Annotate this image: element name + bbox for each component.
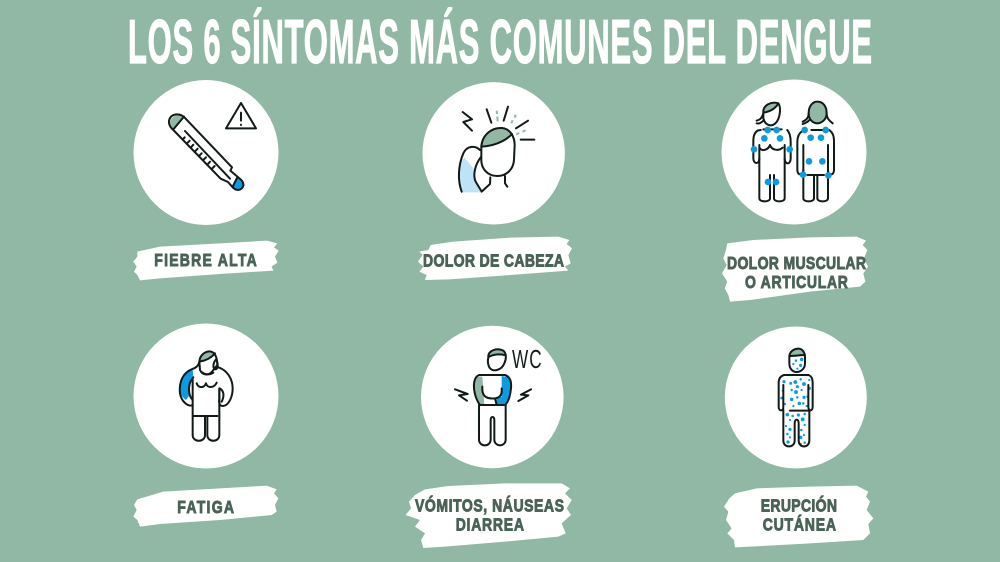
panel: dolor muscular o articular <box>722 80 868 302</box>
icon circle: erupción <box>725 326 867 468</box>
icon circle: vómitos <box>421 326 564 468</box>
icon: thermometer and warning sign <box>169 103 256 190</box>
title: LOS 6 SÍNTOMAS MÁS COMUNES DEL DENGUE <box>128 9 872 77</box>
label brush: dolor de cabeza <box>418 237 572 280</box>
label: fiebre alta: FIEBRE ALTA <box>154 250 257 270</box>
label: vómitos, náuseas, diarrea <box>415 495 564 535</box>
icon circle: dolor muscular <box>722 80 866 224</box>
label: WC sign: WC <box>512 344 542 374</box>
icon: head with pain rays <box>459 107 534 192</box>
label: vómitos, náuseas, diarrea: VÓMITOS, NÁUSEAS <box>415 495 564 516</box>
label brush: fiebre alta <box>133 241 279 280</box>
panel: fatiga <box>133 324 278 527</box>
label: erupción cutánea <box>761 495 837 535</box>
label: dolor muscular o articular: DOLOR MUSCULAR <box>727 253 866 273</box>
icon circle: fiebre alta <box>134 80 278 225</box>
panel: erupción cutánea <box>724 326 873 547</box>
label: dolor muscular o articular <box>727 253 866 292</box>
icon: man with stomach pain and WC sign <box>455 349 531 445</box>
label brush: dolor muscular <box>722 237 868 302</box>
icon circle: fatiga <box>134 324 278 468</box>
label brush: vómitos <box>406 483 572 548</box>
label: erupción cutánea: ERUPCIÓN <box>761 495 837 516</box>
label brush: fatiga <box>133 486 278 527</box>
panel: dolor de cabeza <box>418 82 572 280</box>
label: dolor de cabeza: DOLOR DE CABEZA <box>423 251 564 271</box>
label brush: erupción <box>724 486 873 547</box>
icon: tired woman <box>180 351 233 441</box>
panel: fiebre alta <box>133 80 279 280</box>
label: fatiga: FATIGA <box>177 497 234 517</box>
icon: two bodies with pain points <box>751 102 834 201</box>
label: vómitos, náuseas, diarrea: DIARREA <box>456 515 524 535</box>
panel: vómitos, náuseas, diarrea <box>406 326 572 548</box>
icon circle: dolor de cabeza <box>422 82 565 224</box>
label: dolor muscular o articular: O ARTICULAR <box>745 272 848 292</box>
icon: person with rash <box>779 349 813 446</box>
label: erupción cutánea: CUTÁNEA <box>763 514 836 535</box>
